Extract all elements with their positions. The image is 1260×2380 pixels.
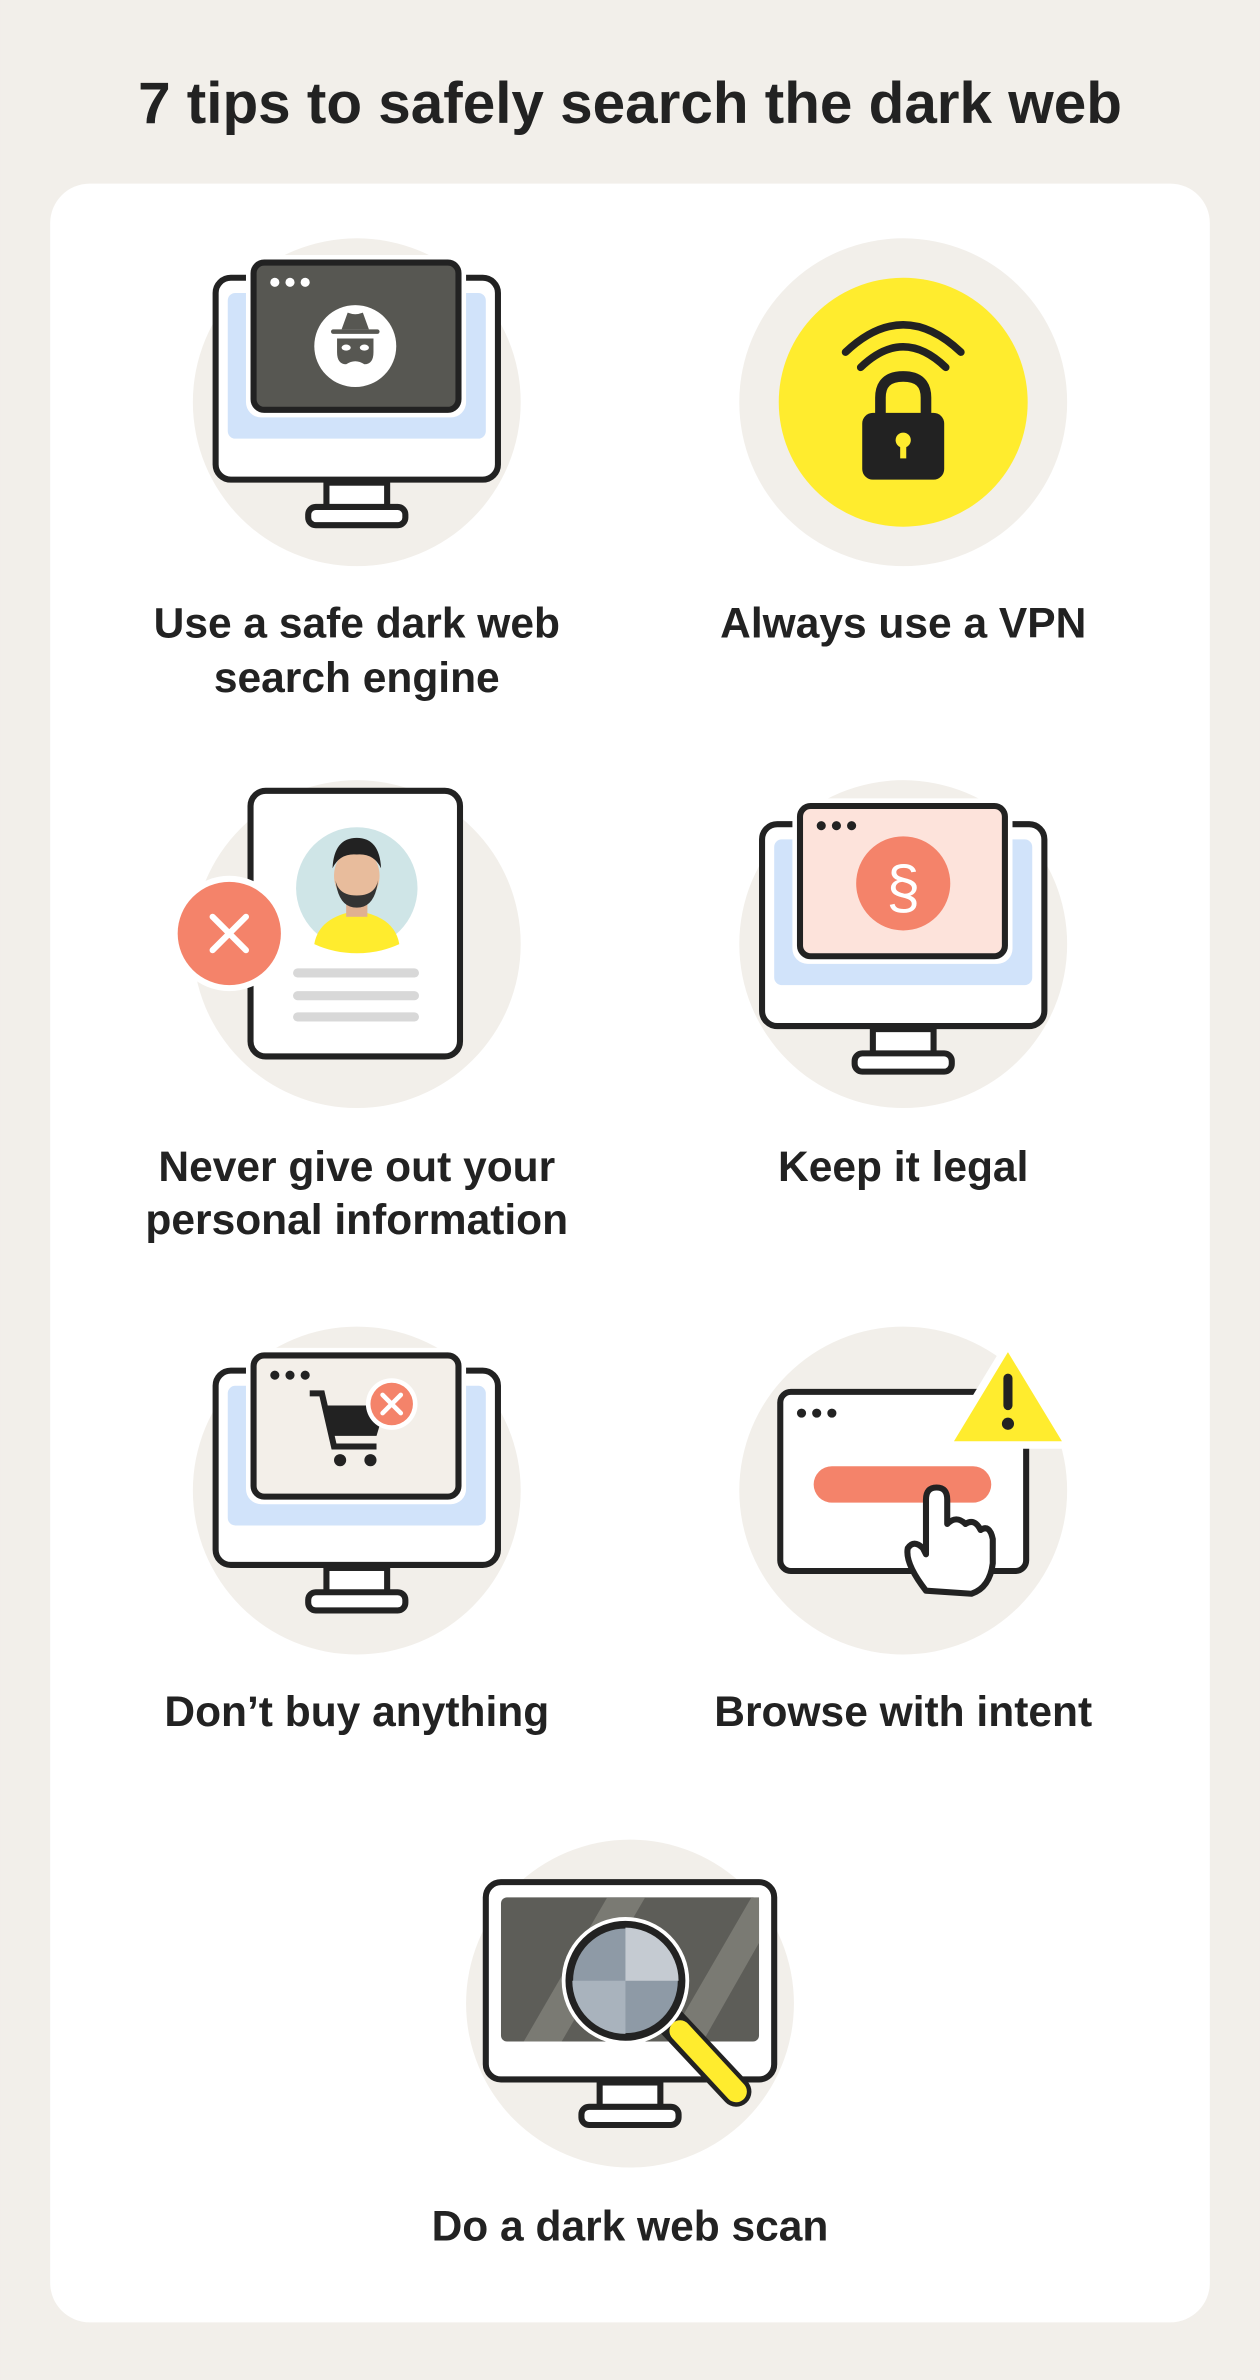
label: tip 1 line 2: search engine xyxy=(214,655,500,702)
icon: monitor with incognito window xyxy=(216,255,498,525)
label: tip 3: Never give out your xyxy=(158,1144,555,1191)
label: tip 6: Browse with intent xyxy=(714,1689,1092,1736)
tip 2: VPN xyxy=(720,238,1086,647)
icon: monitor with legal section sign: § xyxy=(886,853,920,921)
label: tip 5: Don’t buy anything xyxy=(164,1689,549,1736)
label: tip 1: Use a safe dark web xyxy=(154,600,560,647)
tip 4: keep it legal xyxy=(739,780,1067,1191)
tip 3: personal info xyxy=(158,780,555,1191)
label: tip 4: Keep it legal xyxy=(778,1144,1028,1191)
icon: monitor with legal section sign xyxy=(762,798,1044,1072)
tip 6: browse with intent xyxy=(714,1327,1092,1736)
title: 7 tips to safely search the dark web xyxy=(138,71,1122,136)
icon: profile document with X xyxy=(172,791,460,1056)
icon: monitor with magnifier xyxy=(486,1882,774,2125)
icon: monitor with cart xyxy=(216,1348,498,1610)
label: tip 2: Always use a VPN xyxy=(720,600,1086,647)
icon: browser window with cursor and warning xyxy=(780,1345,1069,1594)
icon: yellow circle lock with wifi xyxy=(779,278,1028,527)
label: tip 7: Do a dark web scan xyxy=(432,2203,828,2250)
tip 1: safe search engine xyxy=(154,238,560,647)
label: tip 3 line 2: personal information xyxy=(145,1197,568,1244)
tip 7: dark web scan xyxy=(432,1840,828,2250)
tip 5: don't buy xyxy=(164,1327,549,1736)
